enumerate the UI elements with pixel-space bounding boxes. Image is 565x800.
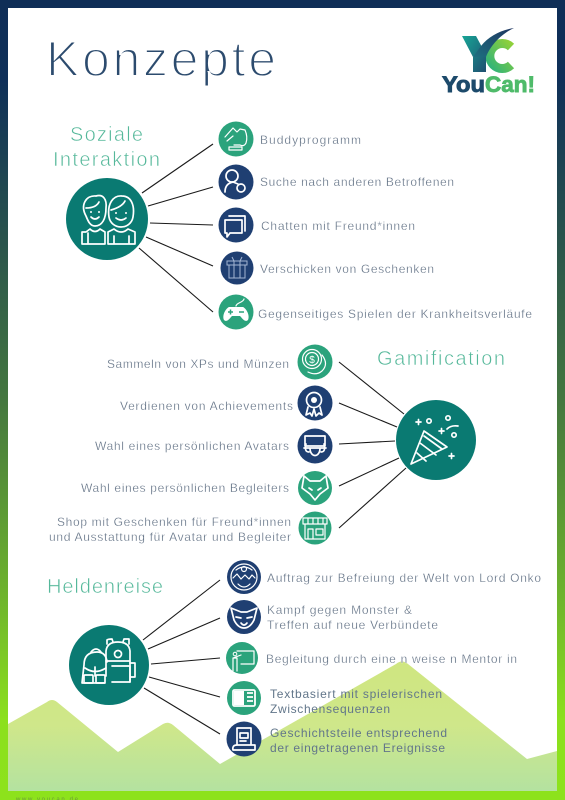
hub: friends icon xyxy=(66,178,148,260)
item: Sammeln: Sammeln von XPs und Münzen xyxy=(107,357,289,371)
heading: Soziale Interaktion: Interaktion xyxy=(53,149,160,171)
item: Achievements xyxy=(120,386,332,420)
item: Suche xyxy=(218,164,454,200)
logo mark xyxy=(462,28,514,72)
heading: Soziale Interaktion xyxy=(53,124,160,171)
item: Kampf xyxy=(227,600,438,634)
connector lines xyxy=(139,144,213,312)
logo wordmark: Can! xyxy=(485,72,535,97)
section: Gamification xyxy=(49,344,505,544)
item: Chatten xyxy=(218,208,415,242)
item: Begleiter: Wahl eines persönlichen Begleiters xyxy=(81,481,289,495)
heading: Soziale Interaktion: Soziale xyxy=(70,124,143,146)
item: Buddyprogramm xyxy=(218,122,361,156)
item: Geschichtsteile: Geschichtsteile entsprechend xyxy=(270,726,447,740)
background mountains xyxy=(8,662,557,791)
item: Geschenke: Verschicken von Geschenken xyxy=(260,262,434,276)
title: Konzepte xyxy=(46,31,276,87)
item: Textbasiert: Textbasiert mit spielerischen xyxy=(270,687,442,701)
item: Chatten: Chatten mit Freund*innen xyxy=(261,219,415,233)
item: Suche: Suche nach anderen Betroffenen xyxy=(260,175,454,189)
item: Buddyprogramm: Buddyprogramm xyxy=(260,133,361,147)
item: Auftrag: Auftrag zur Befreiung der Welt von Lord Onko xyxy=(267,571,541,585)
heading: Gamification: Gamification xyxy=(377,348,505,370)
logo xyxy=(442,28,535,97)
section: Heldenreise xyxy=(47,560,541,756)
item: Textbasiert: Zwischensequenzen xyxy=(270,702,390,716)
connector lines xyxy=(339,362,406,528)
item: Avatar: Wahl eines persönlichen Avatars xyxy=(95,439,289,453)
item: Sammeln xyxy=(107,344,332,380)
item: Shop: Shop mit Geschenken für Freund*innen xyxy=(57,515,291,529)
item: Kampf: Kampf gegen Monster & xyxy=(267,603,412,617)
item: Mentor: Begleitung durch eine n weise n Mentor in xyxy=(266,652,517,666)
item: Mentor xyxy=(226,642,517,674)
item: Textbasiert xyxy=(227,681,442,716)
item: Shop: und Ausstattung für Avatar und Begleiter xyxy=(49,530,291,544)
hub: backpacks icon xyxy=(69,625,149,705)
item: Avatar xyxy=(95,428,332,464)
logo wordmark xyxy=(442,72,535,97)
item: Geschichtsteile xyxy=(226,722,447,756)
item: Sammeln: $ xyxy=(309,355,315,366)
heading: Heldenreise: Heldenreise xyxy=(47,576,163,598)
item: Spielen xyxy=(218,294,532,330)
hub: party popper icon xyxy=(396,400,476,480)
item: Shop xyxy=(49,512,332,544)
item: Achievements: Verdienen von Achievements xyxy=(120,399,293,413)
connector lines xyxy=(143,580,220,734)
logo wordmark: You xyxy=(442,72,485,97)
section: Soziale Interaktion xyxy=(53,122,532,330)
item: Spielen: Gegenseitiges Spielen der Krankheitsverläufe xyxy=(258,307,532,321)
item: Geschenke xyxy=(220,252,434,284)
item: Geschichtsteile: der eingetragenen Ereignisse xyxy=(270,741,445,755)
item: Begleiter xyxy=(81,471,332,505)
item: Auftrag xyxy=(227,560,541,594)
item: Kampf: Treffen auf neue Verbündete xyxy=(267,618,438,632)
